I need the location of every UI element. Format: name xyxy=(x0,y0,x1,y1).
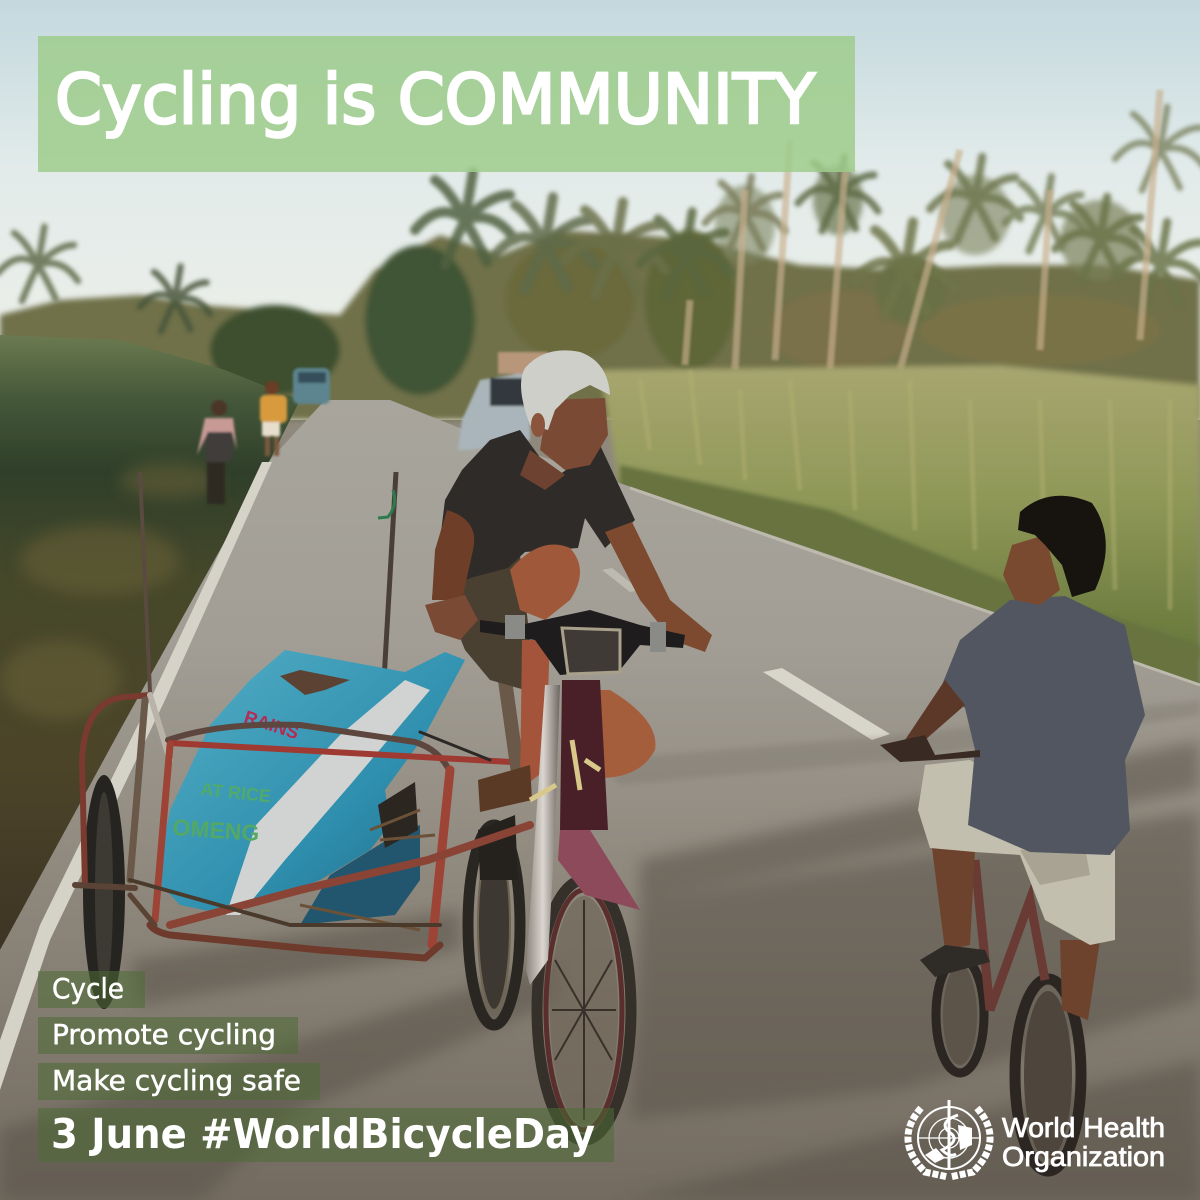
sidecar sticks xyxy=(140,472,150,692)
far leg xyxy=(580,690,655,778)
shorts xyxy=(445,555,530,690)
sticks and debris in sidecar xyxy=(300,810,435,930)
title banner xyxy=(38,36,855,172)
arm left xyxy=(432,510,474,600)
distant car xyxy=(293,368,330,404)
sidecar frame xyxy=(75,695,530,958)
distant cyclists xyxy=(197,381,287,504)
hand left xyxy=(425,595,478,640)
callout: Promote cycling: Promote cycling xyxy=(52,1018,276,1051)
boy rear wheel xyxy=(1015,979,1081,1171)
boy frame xyxy=(975,860,1045,1010)
front fork and frame xyxy=(526,680,640,985)
blue sack xyxy=(156,650,465,925)
legs xyxy=(932,848,975,950)
handlebars and headlamp xyxy=(480,610,685,675)
man's bike rear wheel xyxy=(468,815,520,1025)
face xyxy=(1003,535,1060,605)
shorts xyxy=(918,760,1115,945)
verge right xyxy=(620,465,1200,700)
blue sack: OMENG xyxy=(172,814,260,846)
shirt xyxy=(432,430,635,598)
neck and face xyxy=(520,450,565,490)
left field texture xyxy=(0,462,220,720)
arm right xyxy=(605,522,712,652)
shirt xyxy=(940,596,1145,855)
man on cycle xyxy=(425,350,712,812)
hair xyxy=(521,350,610,430)
right grass xyxy=(600,365,1200,660)
callout: Make cycling safe: Make cycling safe xyxy=(52,1064,301,1097)
logo: World Health Organization: World Health xyxy=(1002,1112,1165,1143)
front wheel xyxy=(537,880,631,1140)
palm trunks xyxy=(685,90,1160,370)
ear xyxy=(531,413,545,437)
background trees xyxy=(0,165,1200,420)
sky xyxy=(0,0,1200,420)
icon: WHO emblem xyxy=(908,1100,990,1177)
logo: World Health Organization: Organization xyxy=(1002,1141,1165,1172)
title banner: Cycling is COMMUNITY xyxy=(55,60,816,140)
callout: Cycle: Cycle xyxy=(52,972,124,1005)
palm crowns xyxy=(0,107,1200,332)
callout: date and hashtag: 3 June #WorldBicycleDay xyxy=(51,1110,595,1158)
sidecar rear wheel xyxy=(83,775,125,1009)
centre dashes xyxy=(763,668,890,740)
hair xyxy=(1018,496,1106,597)
boy on cycle xyxy=(880,496,1145,1171)
arm xyxy=(905,680,965,740)
logo: World Health Organization xyxy=(908,1100,1165,1177)
blue sack: AT RICE xyxy=(200,779,272,806)
near thigh and shin xyxy=(510,544,580,620)
road shadows xyxy=(0,740,1200,1200)
left grass field xyxy=(0,335,300,950)
boy front wheel xyxy=(936,957,984,1073)
road edge line left xyxy=(0,462,272,1090)
blue sack: RAINS xyxy=(242,707,301,743)
silver car behind man xyxy=(458,352,548,450)
road xyxy=(0,400,1200,1200)
callout: Cycle xyxy=(38,971,145,1008)
